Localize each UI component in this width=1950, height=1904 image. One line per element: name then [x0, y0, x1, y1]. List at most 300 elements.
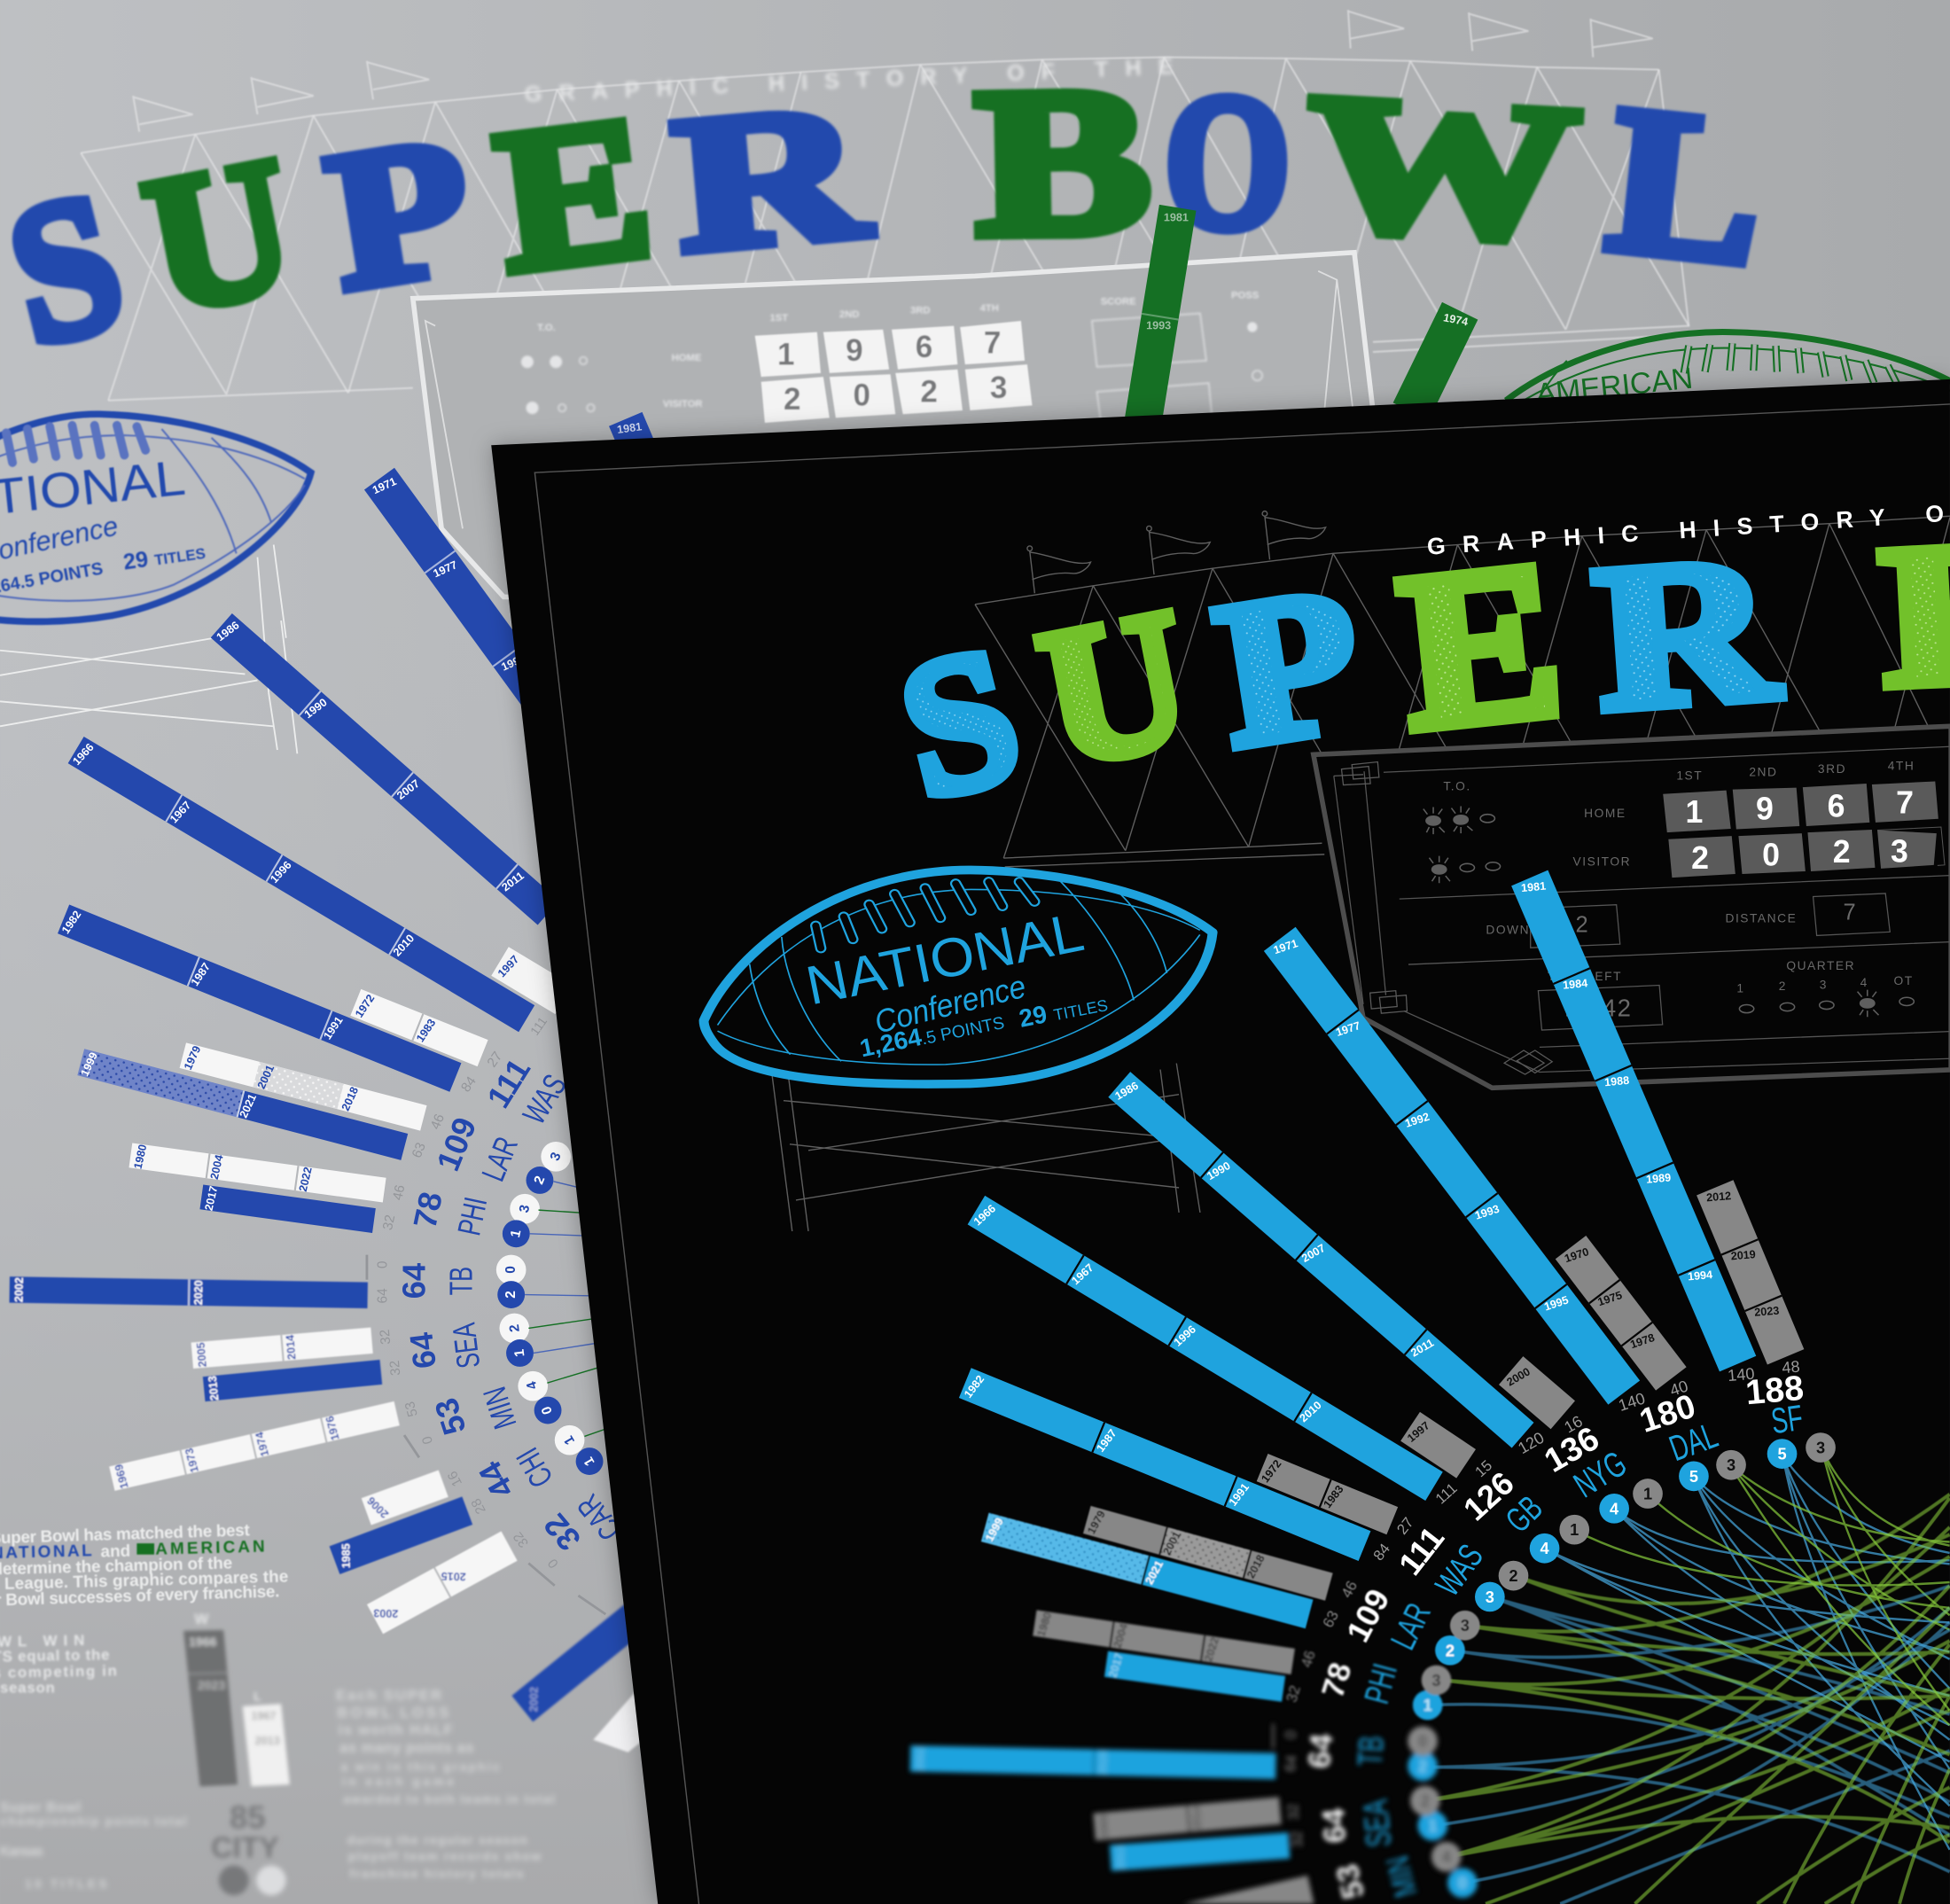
bar: lower team: 2002	[527, 1687, 541, 1712]
TB total: TB	[1352, 1735, 1392, 1767]
WAS totals: 111	[480, 1052, 537, 1114]
SEA total: 1	[1428, 1816, 1437, 1835]
CHI totals: 1	[561, 1432, 578, 1448]
WAS totals: 84	[458, 1073, 480, 1095]
National Conference football on grey poster: 29 TITLES	[121, 539, 207, 575]
SEA totals: 64	[402, 1330, 443, 1370]
intro text block on grey poster: AMERICAN	[155, 1538, 265, 1559]
GB total: 4	[1540, 1539, 1550, 1557]
scoreboard digits 1967 / 2023: 3	[990, 371, 1007, 405]
radial bars and totals: PHI (out of focus)	[1033, 1610, 1451, 1720]
title: SUPER BOWL on grey poster: R	[667, 63, 876, 293]
bar: 1986 team: 2007	[394, 777, 422, 802]
intro text block on grey poster: r Bowl successes of every franchise.	[0, 1582, 280, 1610]
bars: DAL wins: 1977	[1334, 1019, 1361, 1039]
CHI totals: 1	[581, 1454, 598, 1468]
bar: MIN losses: 1974	[254, 1431, 271, 1458]
NYG total: NYG	[1568, 1444, 1634, 1506]
MIN totals: 0	[539, 1404, 556, 1416]
scoreboard digits 1967 / 2023: 2	[784, 382, 801, 417]
TB total	[1272, 1724, 1438, 1781]
SEA total: 64	[1316, 1807, 1353, 1844]
MIN totals: 53	[402, 1400, 421, 1418]
title: SUPER BOWL on grey poster: O	[1163, 52, 1292, 270]
LAR total: 46	[1338, 1578, 1361, 1601]
bars: LAR losses: 2001	[1160, 1529, 1183, 1557]
NYG total: 16	[1561, 1411, 1586, 1437]
subtitle on grey poster: GRAPHIC HISTORY OF THE	[524, 54, 1174, 107]
SF total: SF	[1769, 1399, 1806, 1442]
bars: DAL wins: 1971	[1272, 937, 1299, 956]
bars: PHI losses: 1980	[1035, 1611, 1054, 1638]
bar: PHI losses: 2022	[297, 1166, 315, 1193]
bars: NYG losses: 2000	[1505, 1365, 1533, 1389]
WAS total: 2	[1509, 1566, 1518, 1585]
scoreboard labels: 3	[1820, 979, 1828, 992]
panel: black poster	[491, 379, 1950, 1904]
scoreboard labels: 4	[1860, 976, 1868, 989]
bars: GB wins: 1966	[971, 1202, 998, 1229]
SF total: 188	[1744, 1369, 1806, 1412]
bar: LAR losses: 1979	[182, 1044, 203, 1072]
bar: SEA losses: 2005	[195, 1342, 209, 1368]
bars: TB wins: 2020	[1096, 1750, 1110, 1775]
bars: DAL losses: 1975	[1596, 1289, 1624, 1308]
football stand on grey poster	[0, 545, 297, 753]
scoreboard digits 1967 / 2023: 1	[777, 337, 795, 371]
bar: LAR wins: 1999	[79, 1050, 100, 1078]
note: Each Super Bowl loss: as many points as	[339, 1739, 474, 1756]
bar: CHI wins	[330, 1496, 472, 1574]
GB total	[1432, 1457, 1589, 1564]
football text: Conference: Conference	[871, 968, 1029, 1041]
key chart label: KC 85: CITY	[211, 1831, 279, 1864]
scoreboard labels: 1	[1736, 982, 1745, 995]
bars: LAR wins: 1999	[983, 1516, 1006, 1543]
note: Each Super Bowl loss: Super Bowl	[0, 1800, 81, 1815]
PHI total: PHI	[1358, 1660, 1405, 1708]
SEA totals: SEA	[446, 1321, 487, 1370]
LAR totals: 63	[410, 1141, 429, 1160]
scoreboard captions on grey poster	[521, 291, 1262, 429]
title: SUPER BOWL: P	[1204, 543, 1375, 791]
bars: PHI losses: 2004	[1112, 1622, 1130, 1650]
bars: LAR wins	[981, 1513, 1313, 1628]
PHI totals: 46	[390, 1183, 409, 1202]
bar: SEA wins	[203, 1360, 382, 1401]
bar: MIN losses	[109, 1401, 400, 1491]
LAR total: 3	[1461, 1616, 1470, 1635]
bars: SF losses: 2012	[1706, 1190, 1732, 1204]
scoreboard digits 1967 / 2023	[755, 321, 1033, 423]
NYG total: 1	[1643, 1485, 1652, 1503]
bars: DAL losses	[1556, 1236, 1687, 1391]
scoreboard labels: 2ND	[1749, 766, 1778, 779]
scoreboard captions on grey poster: SCORE	[1101, 297, 1136, 308]
bar: WAS wins: 1982	[59, 909, 83, 936]
scoreboard captions on grey poster: POSS	[1231, 291, 1260, 301]
title: SUPER BOWL: E	[1391, 515, 1572, 776]
bar: 1971 team: 1977	[432, 558, 459, 580]
DAL total: 140	[1616, 1389, 1647, 1415]
scoreboard labels	[1443, 760, 1915, 1022]
bar: CAR losses	[366, 1531, 518, 1635]
scoreboard labels: OT	[1893, 974, 1914, 987]
bar: WAS wins: 1991	[321, 1014, 346, 1042]
scoreboard captions on grey poster: T.O.	[537, 323, 556, 333]
scoreboard labels: HOME	[1584, 807, 1626, 820]
chord diagram connecting teams	[1424, 1448, 1950, 1904]
LAR totals: 3	[548, 1150, 565, 1163]
DAL total	[1616, 1377, 1746, 1491]
NYG total: 4	[1610, 1499, 1619, 1518]
bar: LAR wins	[77, 1049, 408, 1160]
title: SUPER BOWL: S	[881, 605, 1038, 841]
bar: PHI losses: 1980	[132, 1143, 149, 1170]
scoreboard digits 1967 / 2023: 2	[920, 374, 938, 409]
MIN totals: 53	[427, 1393, 473, 1440]
title: SUPER BOWL on grey poster: W	[1302, 54, 1583, 283]
bar: LAR wins: 2021	[238, 1092, 259, 1120]
TB totals: 64	[396, 1262, 433, 1299]
bars: SF wins: 1981	[1521, 880, 1547, 894]
bars: NYG losses	[1499, 1356, 1575, 1429]
bars: NYG wins: 1986	[1113, 1080, 1141, 1103]
bars: TB wins	[910, 1745, 1276, 1779]
scoreboard captions on grey poster: 4TH	[980, 303, 999, 314]
bars: SF wins	[1511, 870, 1756, 1371]
note: Each Super Bowl loss: franchise history totals	[349, 1867, 524, 1881]
bars: WAS losses: 1983	[1322, 1483, 1346, 1510]
MIN totals: MIN	[477, 1383, 524, 1433]
team totals on grey poster	[366, 1014, 628, 1614]
note: Each Super Bowl loss: championship points total	[0, 1814, 186, 1829]
bar: WAS wins	[58, 905, 461, 1092]
bar: GB wins	[68, 737, 534, 1032]
bars: SF losses: 2019	[1730, 1248, 1756, 1262]
WAS totals: 27	[485, 1049, 505, 1070]
intro text block on grey poster: l League. This graphic compares the	[0, 1568, 289, 1594]
scoreboard digit panels 1967 and 2023: 3	[1891, 834, 1908, 870]
WAS totals: 111	[527, 1014, 550, 1038]
grandstand lattice and pennants on grey poster	[81, 10, 1691, 401]
SF total: 5	[1777, 1445, 1787, 1463]
bar: WAS wins: 1987	[189, 961, 213, 988]
GB total: 15	[1472, 1457, 1495, 1480]
bars: PHI losses	[1033, 1610, 1295, 1674]
bar: TB wins: 2020	[192, 1280, 205, 1305]
bar: TB wins: 2002	[13, 1277, 26, 1302]
scoreboard captions on grey poster: VISITOR	[663, 399, 703, 410]
grandstand lattice and pennants	[975, 511, 1950, 867]
bar: TB wins	[9, 1276, 368, 1308]
SEA totals: 1	[511, 1348, 527, 1358]
green winner bars behind title: 1981	[1164, 211, 1189, 223]
bars: NYG wins: 2007	[1299, 1242, 1328, 1265]
bars: MIN losses	[1183, 1876, 1314, 1904]
PHI totals: 1	[508, 1228, 525, 1239]
PHI total: 1	[1424, 1696, 1432, 1714]
key chart: win and loss sample bars: 1966	[189, 1635, 217, 1649]
note: Each Super Bowl loss: a win in this graphic	[340, 1760, 500, 1774]
title: SUPER BOWL: U	[1025, 566, 1205, 808]
bar: 1986 team: 2011	[499, 870, 526, 893]
LAR total: 63	[1319, 1608, 1342, 1630]
title: SUPER BOWL on grey poster: P	[316, 95, 485, 332]
key text: Super Bowl win	[0, 1632, 117, 1696]
PHI totals	[380, 1183, 540, 1247]
football text: titles: 29 TITLES	[1017, 988, 1110, 1033]
TB total: 64	[1282, 1754, 1300, 1773]
PHI total: 32	[1283, 1683, 1304, 1705]
inner border line	[534, 404, 1950, 1904]
GB total: 111	[1432, 1479, 1461, 1508]
bar: 1971 team	[364, 468, 614, 792]
key chart: win and loss sample bars: 2013	[255, 1735, 280, 1747]
bars: NYG wins: 1990	[1205, 1159, 1233, 1182]
bars: GB wins: 2010	[1298, 1399, 1324, 1424]
radial bars: national and american wins on grey poster	[9, 412, 671, 1752]
note: Each Super Bowl loss: playoff team records show	[348, 1849, 541, 1863]
scoreboard digits 1967 / 2023: 6	[916, 330, 932, 364]
PHI totals: 78	[406, 1189, 449, 1231]
SF total: 140	[1727, 1364, 1755, 1385]
bar: GB wins: 1967	[168, 799, 193, 825]
bars: WAS wins: 1982	[962, 1373, 987, 1401]
WAS totals: WAS	[516, 1068, 573, 1130]
scoreboard labels: VISITOR	[1573, 855, 1631, 869]
MIN total: 0	[1458, 1874, 1467, 1892]
bar: MIN losses: 1973	[183, 1447, 201, 1474]
bars: SEA wins: 2013	[1114, 1845, 1127, 1870]
WAS total: 27	[1393, 1514, 1417, 1538]
TB totals: 2	[503, 1291, 519, 1299]
bar: 1986 team: 1990	[302, 696, 330, 721]
CAR totals: 0	[545, 1556, 562, 1571]
intro text block on grey poster	[0, 1521, 289, 1610]
bars: GB losses	[1400, 1412, 1476, 1479]
scoreboard digit panels 1967 and 2023: 2	[1833, 834, 1851, 870]
note: Each Super Bowl loss: during the regular season	[347, 1833, 527, 1847]
CAR totals	[511, 1487, 628, 1614]
TB totals: 0	[376, 1261, 391, 1268]
bars: WAS wins: 1991	[1227, 1481, 1252, 1509]
radial bars: sharp upper teams	[959, 870, 1804, 1561]
WAS total: WAS	[1429, 1538, 1491, 1604]
scoreboard on grey poster	[413, 253, 1373, 597]
National Conference football on grey poster	[0, 414, 311, 621]
bar: SEA losses	[191, 1328, 373, 1369]
title: SUPER BOWL on grey poster: L	[1600, 62, 1774, 308]
MIN totals: 0	[419, 1434, 436, 1446]
scoreboard captions on grey poster: 1ST	[770, 313, 788, 324]
bars: LAR losses: 2018	[1244, 1553, 1268, 1580]
LAR totals: 2	[531, 1174, 548, 1187]
scoreboard captions on grey poster: HOME	[672, 353, 702, 363]
radial bars and totals: LAR (slightly out of focus)	[981, 1506, 1480, 1666]
note: Each Super Bowl loss: Each SUPER	[336, 1687, 441, 1704]
bars: WAS losses	[1257, 1454, 1398, 1534]
LAR total	[1319, 1578, 1480, 1666]
bars: LAR losses	[1083, 1506, 1333, 1601]
bar: GB wins: 2010	[391, 932, 417, 959]
key chart label: KC 85: 85	[230, 1799, 266, 1835]
chords: soft lower band	[1424, 1494, 1950, 1904]
PHI total: 78	[1315, 1658, 1359, 1702]
scoreboard labels: 2	[1576, 913, 1589, 938]
bars: GB wins: 1996	[1172, 1323, 1198, 1349]
SF total: 3	[1816, 1439, 1825, 1457]
bars: SEA losses: 2014	[1190, 1805, 1204, 1830]
National Conference football	[704, 870, 1213, 1084]
MIN total	[1330, 1842, 1478, 1902]
SEA total: 32	[1288, 1830, 1306, 1848]
bars: WAS wins	[959, 1368, 1370, 1561]
bar: 1981 team	[609, 412, 671, 495]
note: Each Super Bowl loss: is worth HALF	[339, 1721, 453, 1738]
LAR total: LAR	[1384, 1597, 1439, 1656]
scoreboard captions on grey poster: 3RD	[910, 306, 930, 316]
scoreboard labels: DISTANCE	[1725, 912, 1797, 925]
American Conference football on grey poster	[1506, 332, 1950, 411]
bar: PHI losses: 2004	[208, 1153, 226, 1181]
key chart: win and loss sample bars: W	[194, 1611, 208, 1627]
green winner bars behind title: 1993	[1146, 319, 1171, 332]
bar: LAR losses	[179, 1042, 427, 1131]
LAR totals: 46	[428, 1112, 448, 1132]
bar: CHI wins: 1985	[339, 1543, 353, 1568]
scoreboard indicator lamps	[1424, 807, 1914, 1017]
bars: SEA wins	[1110, 1832, 1290, 1871]
bars: DAL wins: 1992	[1403, 1111, 1431, 1130]
bar: SEA wins: 2013	[207, 1375, 222, 1401]
CHI totals: 44	[472, 1455, 521, 1504]
NYG total	[1515, 1411, 1663, 1524]
scoreboard labels: QUARTER	[1786, 959, 1855, 972]
GB total: 126	[1456, 1464, 1521, 1527]
note: Each Super Bowl loss: in each game	[342, 1775, 454, 1789]
short chord stubs on grey poster	[525, 1182, 610, 1436]
MIN total: 4	[1442, 1847, 1452, 1866]
scoreboard digit panels 1967 and 2023: 0	[1762, 838, 1780, 873]
football text: NATIONAL: NATIONAL	[801, 901, 1088, 1017]
key chart: win and loss sample bars	[183, 1611, 290, 1786]
SEA totals	[378, 1314, 534, 1377]
bar: PHI losses	[129, 1143, 386, 1203]
scoreboard labels: TIME LEFT	[1548, 970, 1622, 983]
scoreboard labels: 4TH	[1888, 760, 1915, 773]
bar: lower team	[511, 1594, 659, 1721]
key chart: win and loss sample bars: 1967	[251, 1710, 277, 1722]
TB total: 64	[1302, 1732, 1339, 1770]
bar: GB wins: 1996	[268, 859, 294, 886]
PHI total: 3	[1431, 1671, 1441, 1689]
GB total: 1	[1570, 1520, 1579, 1539]
scoreboard captions on grey poster: 2ND	[839, 309, 860, 320]
scoreboard digit panels 1967 and 2023: 1	[1685, 794, 1703, 830]
bar: WAS losses	[350, 989, 488, 1066]
scoreboard digits 1967 / 2023: 9	[846, 333, 863, 368]
bars: DAL losses: 1978	[1628, 1331, 1657, 1351]
green winner bars behind title: 1974	[1442, 311, 1469, 328]
title: SUPER BOWL on grey poster: E	[487, 74, 662, 315]
bars: SF wins: 1988	[1604, 1074, 1630, 1089]
PHI total	[1283, 1649, 1451, 1720]
scoreboard labels: 3RD	[1818, 762, 1846, 776]
CAR totals: 32	[536, 1507, 588, 1557]
MIN totals: 4	[524, 1379, 541, 1392]
CHI totals: CHI	[510, 1441, 560, 1494]
bars: GB losses: 1997	[1405, 1419, 1432, 1445]
bars: SF wins: 1984	[1563, 977, 1588, 992]
bars: SF wins: 1989	[1645, 1171, 1672, 1186]
DAL total: 40	[1667, 1377, 1690, 1400]
bars: SEA losses: 2005	[1097, 1814, 1112, 1838]
scoreboard labels: 12:42	[1564, 995, 1633, 1022]
scoreboard digits 1967 / 2023: 7	[984, 326, 1001, 361]
DAL total: 180	[1635, 1387, 1700, 1440]
CAR totals: 32	[511, 1529, 532, 1550]
scoreboard digit panels 1967 and 2023: 2	[1691, 840, 1709, 876]
key chart: win and loss sample bars: L	[254, 1689, 261, 1704]
WAS total: 3	[1486, 1588, 1494, 1606]
bar: CAR losses: 2015	[441, 1570, 466, 1583]
WAS total	[1370, 1514, 1528, 1611]
scoreboard labels: 7	[1844, 900, 1857, 925]
bar: PHI wins	[199, 1184, 376, 1234]
bar: lower loss	[593, 1679, 666, 1752]
bar: 1981 team: 1981	[616, 420, 643, 436]
bars: NYG wins: 2011	[1408, 1337, 1436, 1360]
WAS totals	[458, 1014, 573, 1130]
note: Each Super Bowl loss: BOWL LOSS	[337, 1705, 449, 1721]
LAR totals	[410, 1112, 571, 1194]
CHI totals: 16	[445, 1469, 465, 1489]
bar: MIN losses: 1976	[324, 1415, 342, 1442]
bars: DAL wins: 1995	[1542, 1293, 1570, 1314]
PHI total: 46	[1298, 1649, 1319, 1669]
title: SUPER BOWL: R	[1588, 513, 1783, 753]
bars: DAL wins: 1993	[1473, 1203, 1501, 1222]
bars: GB wins	[968, 1196, 1443, 1501]
WAS total: 84	[1370, 1541, 1393, 1564]
LAR total: 2	[1446, 1641, 1455, 1659]
football text: points: 1,264.5 POINTS	[857, 1006, 1006, 1062]
SEA totals: 2	[507, 1323, 523, 1333]
bars: LAR losses: 1979	[1085, 1509, 1108, 1536]
bar: MIN losses: 1969	[113, 1463, 131, 1490]
SF total	[1727, 1357, 1836, 1469]
scoreboard digit panels 1967 and 2023: 9	[1756, 792, 1774, 827]
key chart: win and loss sample bars: 2023	[198, 1678, 225, 1692]
LAR total: 109	[1339, 1583, 1397, 1648]
TB total: 0	[1282, 1730, 1299, 1740]
bar: WAS losses: 1983	[414, 1017, 438, 1044]
bars: LAR wins: 2021	[1143, 1558, 1166, 1587]
TB totals: TB	[443, 1267, 480, 1295]
title: SUPER BOWL on grey poster: B	[974, 43, 1152, 279]
TB total: 2	[1418, 1757, 1427, 1775]
DAL total: 5	[1689, 1467, 1698, 1486]
bars: PHI wins	[1104, 1650, 1285, 1702]
MIN total: MIN	[1379, 1853, 1424, 1900]
SEA total: 32	[1284, 1803, 1302, 1821]
TB totals: 64	[376, 1288, 391, 1304]
bars: DAL losses: 1970	[1563, 1245, 1590, 1265]
bar: CHI losses	[362, 1471, 448, 1526]
football stand	[771, 1064, 1200, 1231]
note: Each Super Bowl loss: Kansas	[0, 1844, 43, 1859]
